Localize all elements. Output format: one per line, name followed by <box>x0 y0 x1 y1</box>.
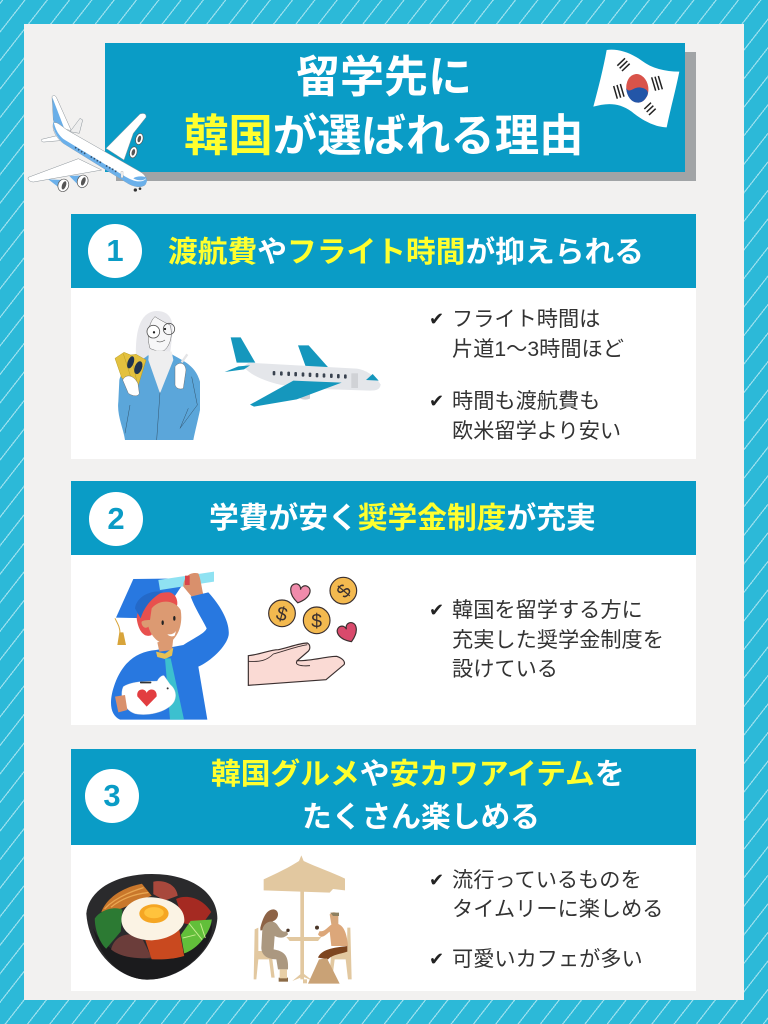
section 1 panel <box>71 288 696 459</box>
bullet: cost: ✔ <box>429 391 444 412</box>
bullet: cafes: ✔ <box>429 949 444 970</box>
icon: airplane <box>224 337 381 407</box>
number badge 1: 1 <box>106 233 124 268</box>
bullet: scholarship: 充実した奨学金制度を <box>452 629 664 652</box>
bullet: flight time: フライト時間は <box>452 308 600 331</box>
icon: airplane in title <box>28 95 147 192</box>
number badge 2 <box>89 492 143 546</box>
title banner shadow <box>116 52 696 181</box>
section 3 heading line 1: 韓国グルメや安カワアイテムを <box>211 758 625 791</box>
bullet: scholarship: 韓国を留学する方に <box>452 599 643 622</box>
bullet: cost <box>429 390 621 443</box>
number badge 1 <box>88 224 142 278</box>
section 2 heading bar <box>71 481 696 555</box>
number badge 3 <box>85 769 139 823</box>
bullet: flight time: 片道1～3時間ほど <box>452 338 624 361</box>
bullet: trends: 流行っているものを <box>452 869 642 892</box>
bullet: scholarship: ✔ <box>429 600 444 621</box>
bullet: trends: タイムリーに楽しめる <box>452 898 663 921</box>
section 3 heading bar <box>71 749 696 845</box>
icon: hand receiving coins and hearts: $ <box>333 581 356 602</box>
title line 1: 留学先に <box>296 53 472 102</box>
section 1 heading bar <box>71 214 696 288</box>
number badge 3: 3 <box>103 778 121 813</box>
icon: hand receiving coins and hearts: $ <box>311 611 322 632</box>
bullet: flight time: ✔ <box>429 309 444 330</box>
title banner <box>105 43 685 172</box>
icon: hand receiving coins and hearts <box>248 576 358 686</box>
icon: cafe couple under parasol <box>254 856 352 984</box>
section 3 heading line 2: たくさん楽しめる <box>302 801 540 834</box>
section 2 panel <box>71 555 696 725</box>
icon: bibimbap bowl <box>86 874 218 980</box>
bullet: scholarship <box>429 599 664 681</box>
icon: woman holding money <box>114 311 200 440</box>
bullet: trends <box>429 869 663 921</box>
title line 2: 韓国が選ばれる理由 <box>184 112 584 161</box>
icon: hand receiving coins and hearts: $ <box>274 603 290 626</box>
section 2 heading: 学費が安く奨学金制度が充実 <box>209 502 596 535</box>
section 1 heading: 渡航費やフライト時間が抑えられる <box>168 236 644 269</box>
bullet: flight time <box>429 308 624 361</box>
bullet: trends: ✔ <box>429 870 444 891</box>
section 3 panel <box>71 845 696 991</box>
icon: Korean flag <box>593 50 680 128</box>
bullet: scholarship: 設けている <box>452 658 558 681</box>
icon: graduate with piggy bank <box>111 572 229 720</box>
bullet: cost: 欧米留学より安い <box>452 420 621 443</box>
bullet: cafes: 可愛いカフェが多い <box>452 948 643 971</box>
number badge 2: 2 <box>107 501 125 536</box>
bullet: cost: 時間も渡航費も <box>452 390 600 413</box>
